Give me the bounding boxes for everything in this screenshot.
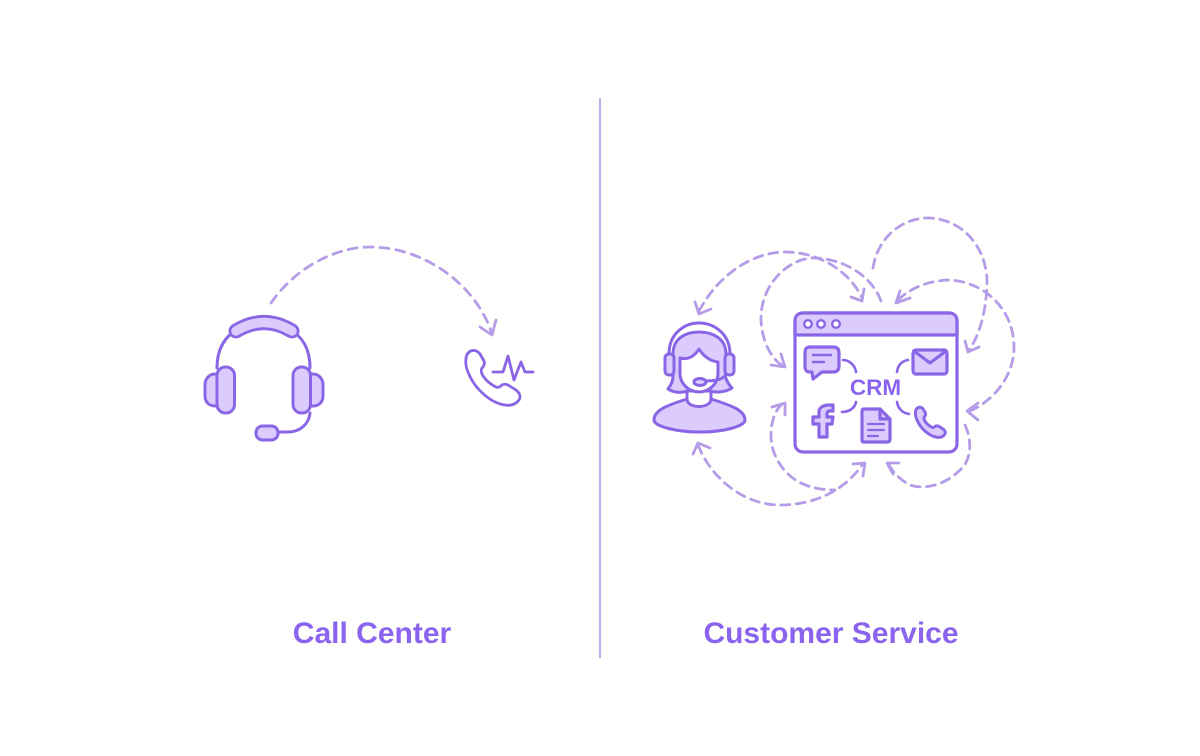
icon: facebook: [813, 405, 833, 437]
icon: agent: [654, 323, 745, 432]
connectors: [842, 360, 909, 414]
icon: document: [862, 409, 890, 442]
icon: phone with pulse: [466, 350, 533, 405]
panel: call center: [205, 247, 533, 650]
icon: crm window: [795, 313, 957, 452]
icon: headset: [205, 322, 323, 440]
heading: call center: Call Center: [293, 617, 452, 650]
icon: chat bubble: [805, 347, 839, 379]
panel: customer service: [654, 218, 1014, 650]
icon: crm phone: [915, 407, 945, 437]
arrow: headset to phone: [271, 247, 496, 335]
label: crm: CRM: [850, 375, 901, 400]
heading: customer service: Customer Service: [703, 617, 959, 650]
arrows: data flows: [693, 218, 1014, 505]
icon: envelope: [913, 350, 947, 374]
